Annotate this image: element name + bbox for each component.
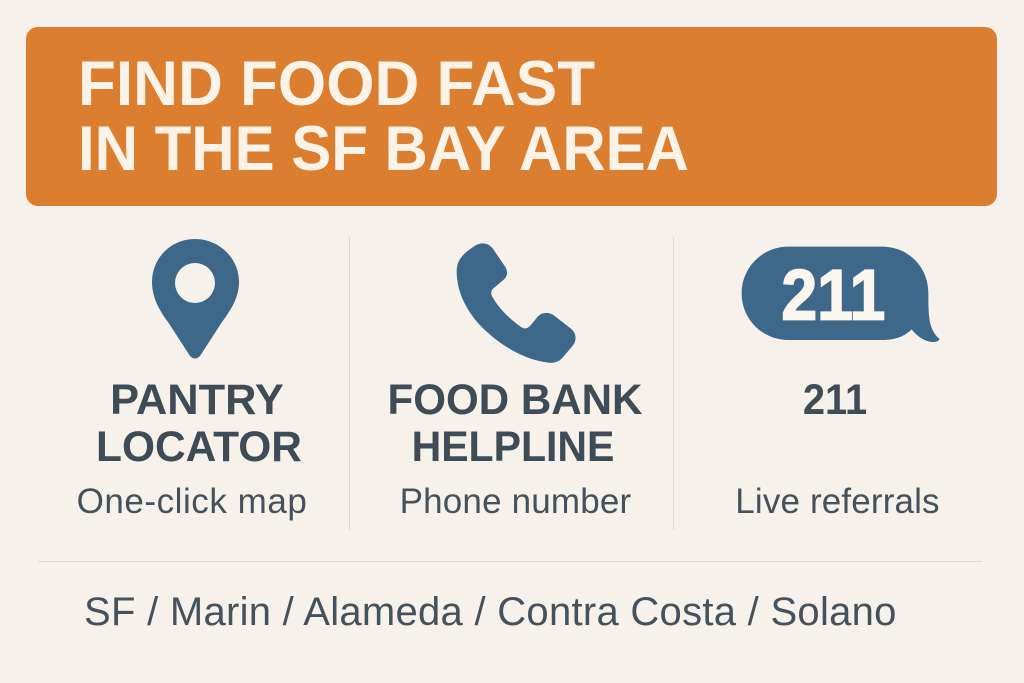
heading: pantry locator xyxy=(96,376,302,471)
icon: 211 speech bubble: 211 xyxy=(781,256,885,335)
title: FIND FOOD FAST xyxy=(78,49,595,119)
panel: 211 xyxy=(735,246,940,521)
header banner xyxy=(26,27,997,206)
heading: food bank helpline xyxy=(387,376,642,471)
heading: pantry locator: LOCATOR xyxy=(96,423,302,471)
heading: food bank helpline: FOOD BANK xyxy=(387,376,642,424)
icon: map pin xyxy=(152,239,239,358)
panel: pantry locator xyxy=(77,239,307,521)
text: one-click map: One-click map xyxy=(77,482,307,521)
panel: food bank helpline xyxy=(387,243,642,521)
icon: phone xyxy=(456,243,576,363)
heading: food bank helpline: HELPLINE xyxy=(411,423,614,471)
heading: pantry locator: PANTRY xyxy=(110,376,284,424)
text: phone number: Phone number xyxy=(400,482,631,521)
title xyxy=(78,49,689,184)
icon: 211 speech bubble xyxy=(742,246,940,342)
heading: 211: 211 xyxy=(803,376,867,424)
footer: counties: SF / Marin / Alameda / Contra Costa / Solano xyxy=(84,590,897,634)
title: IN THE SF BAY AREA xyxy=(78,114,689,184)
text: live referrals: Live referrals xyxy=(735,482,940,521)
